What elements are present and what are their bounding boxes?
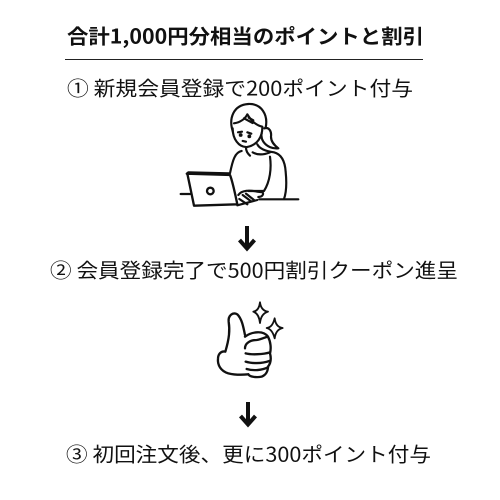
title: 合計1,000円分相当のポイントと割引 [67,20,424,50]
step 1 text: ① 新規会員登録で200ポイント付与 [67,72,413,102]
icon: thumbs up with sparkles [218,302,283,377]
icon: woman at laptop [181,104,298,206]
arrow 2 [240,402,256,424]
step 3 text: ③ 初回注文後、更に300ポイント付与 [66,438,431,468]
arrow 1 [240,226,254,248]
step 2 text: ② 会員登録完了で500円割引クーポン進呈 [50,254,458,284]
